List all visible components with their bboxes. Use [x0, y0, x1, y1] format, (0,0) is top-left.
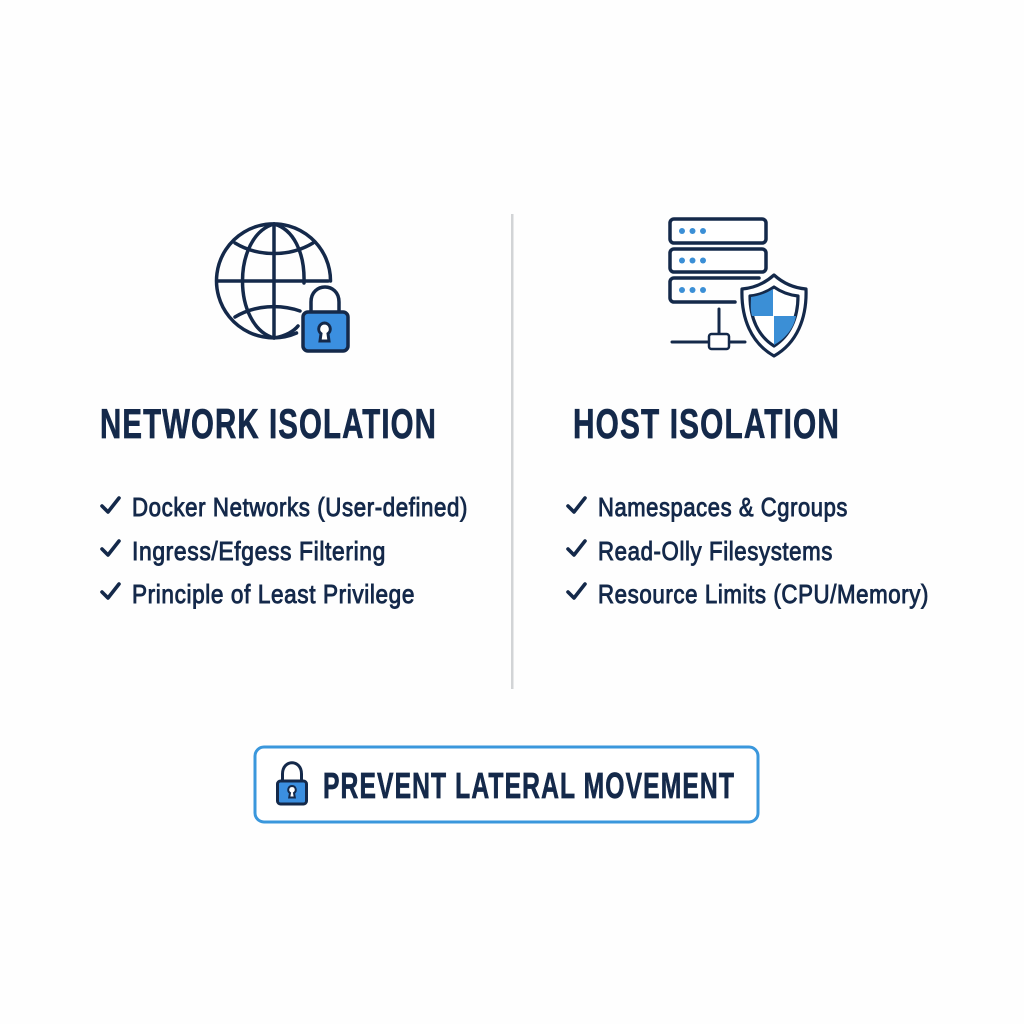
item: namespaces: Namespaces & Cgroups	[598, 492, 848, 522]
server stack	[670, 219, 766, 302]
shield	[742, 275, 806, 356]
callout text: PREVENT LATERAL MOVEMENT	[323, 765, 735, 806]
item: docker networks: Docker Networks (User-defined)	[132, 492, 468, 522]
item: ingress filtering: Ingress/Efgess Filtering	[132, 536, 386, 566]
item: resource limits: Resource Limits (CPU/Memory)	[598, 579, 929, 609]
globe	[217, 224, 331, 338]
network connector	[672, 309, 745, 349]
heading: host isolation: HOST ISOLATION	[573, 400, 840, 447]
padlock	[303, 287, 348, 351]
icon: servers with shield	[670, 219, 806, 356]
item: read-only filesystems: Read-Olly Filesystems	[598, 536, 833, 566]
panel: network isolation	[100, 224, 468, 609]
center divider	[511, 214, 514, 689]
callout border	[255, 747, 758, 822]
panel: host isolation	[568, 219, 929, 609]
checklist: network isolation	[102, 492, 468, 609]
icon: small padlock	[278, 763, 306, 804]
item: least privilege: Principle of Least Privilege	[132, 579, 415, 609]
callout: prevent lateral movement	[255, 747, 758, 822]
heading: network isolation: NETWORK ISOLATION	[100, 400, 437, 447]
icon: globe with padlock	[217, 224, 348, 351]
checklist: host isolation	[568, 492, 929, 609]
